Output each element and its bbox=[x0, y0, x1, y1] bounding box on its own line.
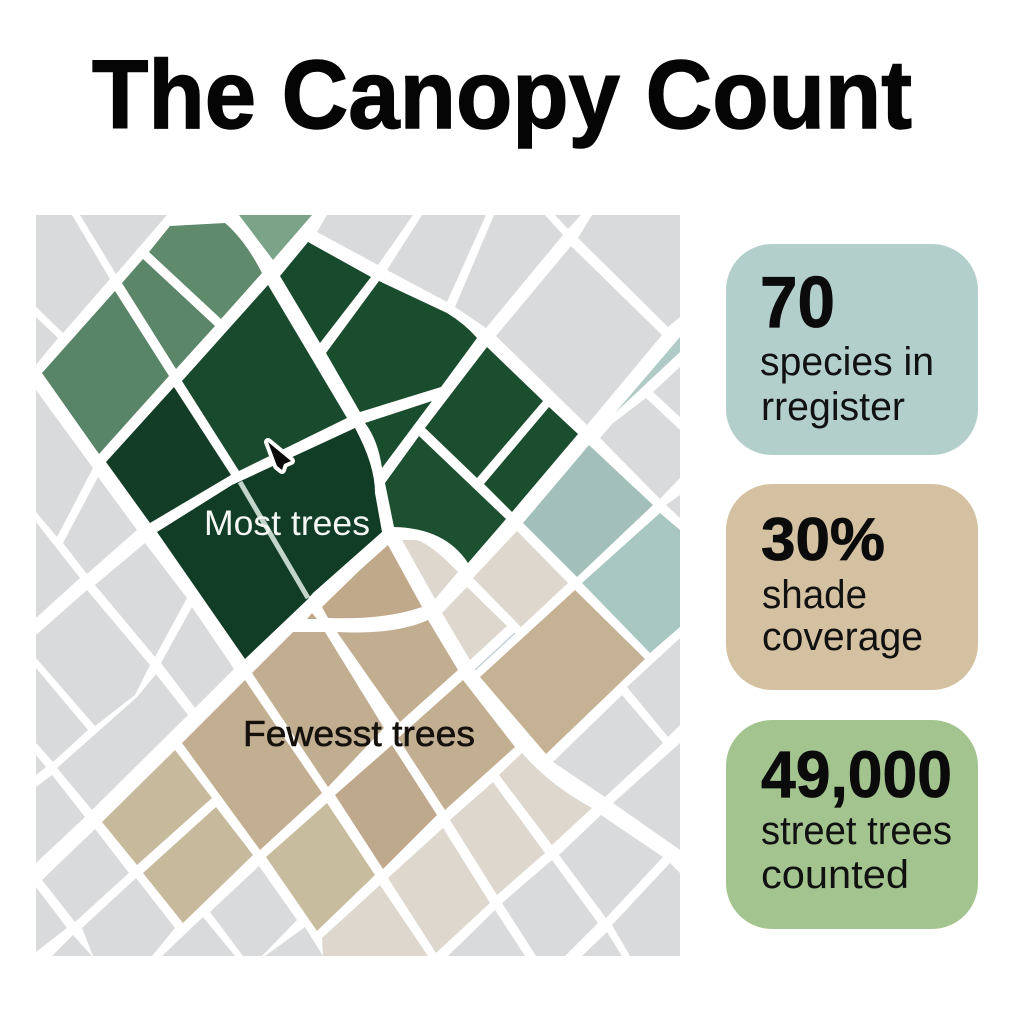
text: shade coverage: coverage bbox=[762, 615, 923, 659]
title: The Canopy Count bbox=[92, 40, 912, 149]
map: teal blocks bbox=[523, 337, 680, 653]
card: species bbox=[726, 244, 978, 455]
panel: tree canopy map bbox=[36, 215, 680, 956]
card: street trees bbox=[726, 720, 978, 929]
text: species in register: rregister bbox=[761, 385, 905, 429]
text: species in register: species in bbox=[760, 340, 934, 384]
text: street trees counted bbox=[761, 809, 952, 897]
text: street trees counted: street trees bbox=[761, 809, 952, 853]
icon: cursor arrow bbox=[268, 442, 291, 470]
map: light beige blocks bbox=[322, 531, 592, 956]
stat: 70: 70 bbox=[760, 263, 835, 343]
stat: 49,000: 49,000 bbox=[761, 737, 952, 811]
text: street trees counted: counted bbox=[761, 853, 909, 897]
text: species in register bbox=[760, 340, 934, 429]
stat: 30%: 30% bbox=[761, 506, 885, 573]
text: shade coverage bbox=[762, 573, 923, 659]
map: fewest trees blocks bbox=[102, 545, 645, 931]
card: shade coverage bbox=[726, 484, 978, 690]
label: fewest trees: Fewesst trees bbox=[243, 713, 475, 754]
map: mid-green blocks bbox=[42, 215, 312, 454]
label: most trees: Most trees bbox=[204, 504, 370, 543]
map: most trees blocks bbox=[106, 242, 578, 659]
map: grey low-data blocks bbox=[36, 215, 680, 956]
text: shade coverage: shade bbox=[762, 573, 867, 617]
